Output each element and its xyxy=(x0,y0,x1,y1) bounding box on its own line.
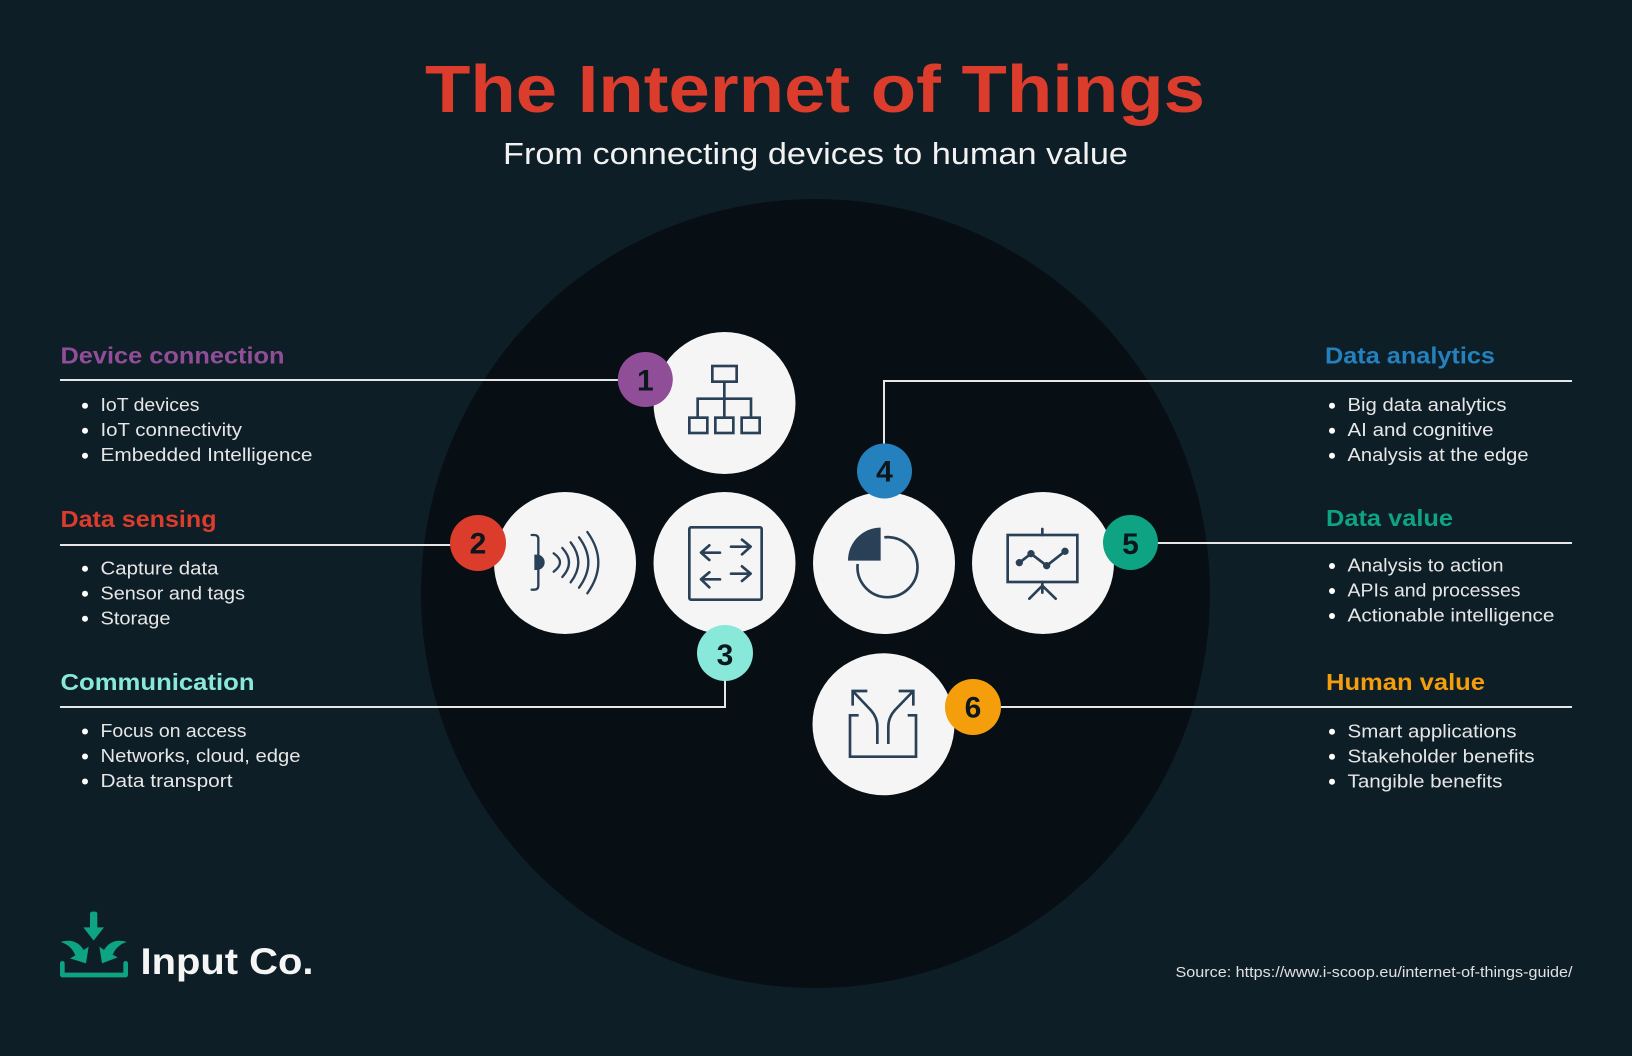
badge 5 xyxy=(1103,515,1158,570)
list: data analytics: Big data analytics xyxy=(1348,394,1506,415)
node 5: data value xyxy=(972,492,1158,634)
list: communication xyxy=(82,720,300,791)
heading: device connection: Device connection xyxy=(60,342,284,368)
list: human value: Tangible benefits xyxy=(1348,770,1502,792)
node 3: communication xyxy=(654,492,796,681)
panel: communication xyxy=(60,669,725,791)
icon: sensor waves xyxy=(532,532,598,593)
list: human value: Stakeholder benefits xyxy=(1348,746,1534,766)
heading: communication: Communication xyxy=(60,669,254,695)
node 6: human value xyxy=(812,653,1001,795)
logo wordmark: Input Co. xyxy=(140,941,314,982)
badge 3: 3 xyxy=(717,639,733,672)
list: communication: Data transport xyxy=(100,770,232,791)
badge 2 xyxy=(450,515,506,571)
list: communication: Focus on access xyxy=(100,720,246,741)
badge 6 xyxy=(945,679,1001,735)
panel: human value xyxy=(995,669,1572,792)
list: data value: APIs and processes xyxy=(1348,580,1520,600)
list: data sensing: Storage xyxy=(100,608,170,628)
panel: device connection xyxy=(60,342,620,465)
panel: data analytics xyxy=(884,342,1572,465)
heading: data value: Data value xyxy=(1326,505,1453,531)
list: data value: Analysis to action xyxy=(1348,554,1504,576)
connector line 5 xyxy=(1150,542,1572,544)
list: data analytics: Analysis at the edge xyxy=(1348,444,1528,465)
badge 3 xyxy=(697,625,753,681)
list: data analytics: AI and cognitive xyxy=(1348,419,1494,440)
list: device connection: IoT connectivity xyxy=(100,419,243,440)
list: data sensing: Sensor and tags xyxy=(100,582,245,604)
logo: Input Co. xyxy=(61,912,314,982)
list: device connection: IoT devices xyxy=(100,394,200,415)
node 2: data sensing xyxy=(450,492,636,634)
icon: presentation board xyxy=(1008,529,1077,599)
connector line 1 xyxy=(60,379,620,381)
heading: human value: Human value xyxy=(1326,669,1485,695)
list: human value xyxy=(1329,720,1534,792)
icon: diverging arrows xyxy=(850,691,916,757)
node 4: data analytics xyxy=(813,444,955,634)
connector line 4 xyxy=(884,381,1572,450)
subtitle: From connecting devices to human value xyxy=(503,136,1128,171)
heading: data analytics: Data analytics xyxy=(1325,342,1495,368)
badge 1: 1 xyxy=(637,364,654,398)
list: communication: Networks, cloud, edge xyxy=(100,745,300,766)
list: data analytics xyxy=(1329,394,1528,465)
list: data sensing xyxy=(82,558,245,628)
badge 6: 6 xyxy=(965,692,981,724)
connector line 2 xyxy=(60,544,452,546)
icon: pie chart xyxy=(848,528,917,597)
node 1: device connection xyxy=(618,332,796,474)
heading: data sensing: Data sensing xyxy=(60,506,217,532)
list: human value: Smart applications xyxy=(1348,720,1516,742)
icon: input arrows xyxy=(61,912,127,975)
panel: data sensing xyxy=(60,506,452,628)
badge 4: 4 xyxy=(876,456,893,488)
list: device connection xyxy=(82,394,312,465)
badge 1 xyxy=(618,352,673,407)
panel: data value xyxy=(1150,505,1572,626)
icon: exchange arrows xyxy=(689,527,762,600)
badge 4 xyxy=(857,444,912,498)
source note: Source: https://www.i-scoop.eu/internet-of-things-guide/ xyxy=(1176,965,1574,981)
badge 5: 5 xyxy=(1122,528,1139,561)
list: data sensing: Capture data xyxy=(100,558,219,578)
badge 2: 2 xyxy=(470,528,486,560)
list: device connection: Embedded Intelligence xyxy=(100,444,312,465)
list: data value xyxy=(1329,554,1554,626)
title: The Internet of Things xyxy=(425,52,1205,127)
connector line 6 xyxy=(995,706,1572,708)
connector line 3 xyxy=(60,675,725,707)
list: data value: Actionable intelligence xyxy=(1348,604,1554,626)
icon: hierarchy xyxy=(689,366,760,433)
